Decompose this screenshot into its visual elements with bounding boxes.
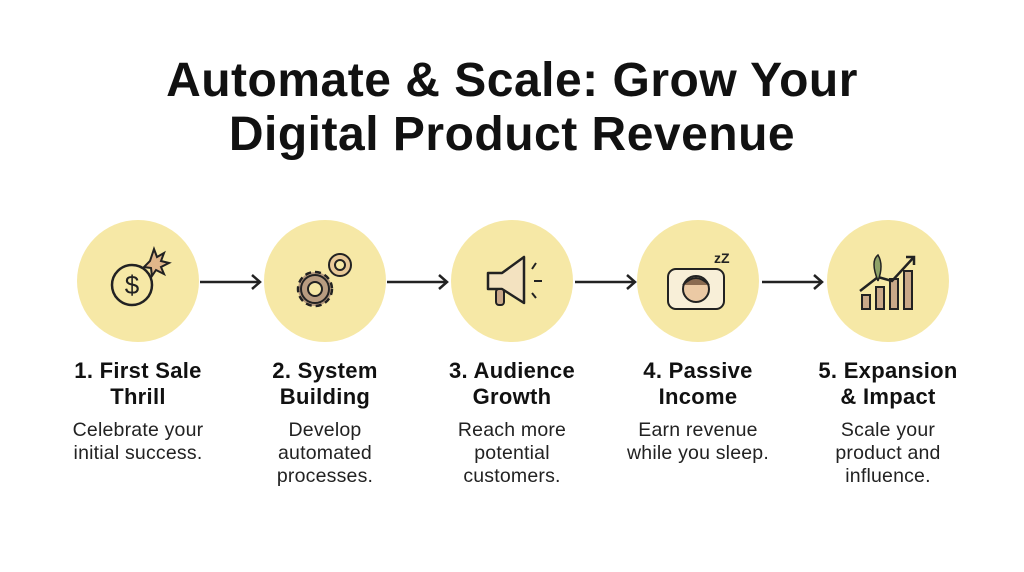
step 5: expansion & impact: influence. (845, 465, 931, 487)
step 1: first sale thrill (73, 220, 203, 464)
arrow 3 (575, 274, 637, 290)
step 4: passive income (627, 220, 769, 464)
step 1: first sale thrill: Celebrate your (73, 419, 203, 441)
step 2: system building (264, 220, 386, 487)
step 2: system building: automated (278, 442, 372, 464)
icon: sleeping face: zZ (714, 250, 730, 266)
step 5: expansion & impact: & Impact (840, 384, 936, 409)
icon: megaphone (451, 220, 573, 342)
title: Digital Product Revenue (229, 108, 795, 161)
icon: dollar coin with burst: $ (125, 270, 140, 300)
step 2: system building: Building (280, 384, 370, 409)
arrow 1 (200, 274, 262, 290)
title (166, 54, 858, 161)
title: Automate & Scale: Grow Your (166, 54, 858, 107)
step 2: system building: processes. (277, 465, 373, 487)
icon: dollar coin with burst (77, 220, 199, 342)
arrow 4 (762, 274, 824, 290)
icon: sleeping face (637, 220, 759, 342)
step 3: audience growth: Reach more (458, 419, 566, 441)
step 5: expansion & impact: 5. Expansion (818, 358, 958, 383)
step 3: audience growth: Growth (473, 384, 551, 409)
step 2: system building: 2. System (272, 358, 378, 383)
step 3: audience growth: 3. Audience (449, 358, 575, 383)
step 5: expansion & impact: Scale your (841, 419, 935, 441)
step 1: first sale thrill: Thrill (110, 384, 166, 409)
step 1: first sale thrill: initial success. (74, 442, 202, 464)
icon: growth chart with plant (827, 220, 949, 342)
step 1: first sale thrill: 1. First Sale (74, 358, 202, 383)
icon: gears (264, 220, 386, 342)
step 4: passive income: while you sleep. (627, 442, 769, 464)
step 4: passive income: 4. Passive (643, 358, 753, 383)
step 5: expansion & impact (818, 220, 958, 487)
step 2: system building: Develop (289, 419, 361, 441)
step 3: audience growth: potential (474, 442, 550, 464)
step 4: passive income: Income (659, 384, 737, 409)
arrow 2 (387, 274, 449, 290)
step 4: passive income: Earn revenue (638, 419, 758, 441)
step 3: audience growth: customers. (463, 465, 561, 487)
step 5: expansion & impact: product and (835, 442, 941, 464)
step 3: audience growth (449, 220, 575, 487)
